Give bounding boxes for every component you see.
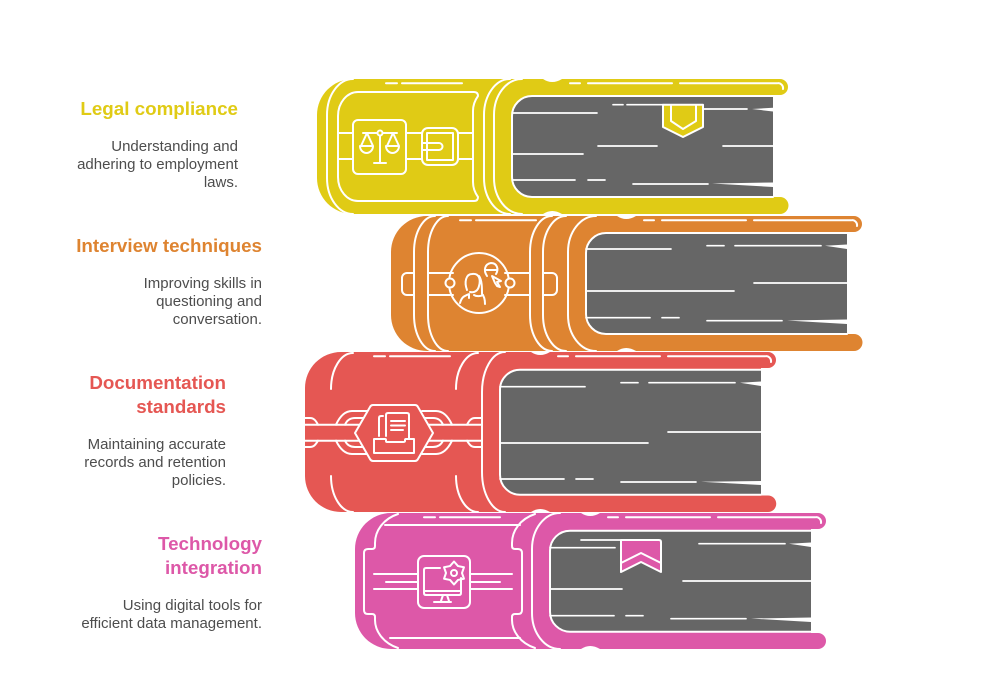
heading: interview techniques: Interview techniques: [76, 235, 262, 256]
book cover: [305, 352, 776, 512]
strap lines: [374, 574, 512, 589]
description: interview techniques: conversation.: [173, 311, 262, 328]
text block: legal compliance: [77, 98, 238, 191]
description: interview techniques: Improving skills in: [144, 275, 262, 292]
description: legal compliance: laws.: [204, 174, 238, 191]
book: interview techniques (orange): [391, 216, 862, 351]
description: legal compliance: Understanding and: [111, 138, 238, 155]
page lines: [586, 246, 847, 321]
cover notches: [543, 79, 562, 82]
page block: [500, 370, 761, 495]
heading: technology integration: integration: [165, 557, 262, 578]
description: documentation standards: records and retention: [84, 454, 226, 471]
heading: technology integration: [158, 533, 262, 578]
chain strap: [305, 411, 482, 454]
page lines: [513, 105, 773, 184]
heading: legal compliance: Legal compliance: [80, 98, 238, 119]
cover outlines: [331, 352, 771, 512]
page block: [512, 96, 773, 197]
text block: documentation standards: [84, 372, 226, 489]
description: technology integration: [81, 597, 262, 632]
page lines: [500, 383, 761, 482]
cover notches: [581, 513, 600, 516]
page block: [586, 233, 847, 334]
bookmark: [621, 540, 661, 572]
page block: [550, 531, 811, 632]
description: legal compliance: [77, 138, 238, 191]
description: documentation standards: [84, 436, 226, 489]
strap: [338, 133, 473, 159]
icon: buckle: [422, 128, 458, 165]
description: interview techniques: [144, 275, 262, 328]
heading: documentation standards: standards: [136, 396, 226, 417]
cover notches: [531, 352, 550, 355]
description: technology integration: efficient data management.: [81, 615, 262, 632]
heading: documentation standards: Documentation: [89, 372, 226, 393]
page lines: [550, 540, 811, 619]
cover notches: [617, 216, 636, 219]
icon: computer with gear: [418, 556, 470, 608]
book: legal compliance (yellow): [317, 79, 788, 214]
description: documentation standards: policies.: [172, 472, 226, 489]
icon: interview people: [446, 253, 514, 313]
description: interview techniques: questioning and: [156, 293, 262, 310]
text block: interview techniques: [76, 235, 262, 328]
book cover: [391, 216, 862, 351]
book cover: [317, 79, 788, 214]
description: technology integration: Using digital tools for: [123, 597, 262, 614]
book: documentation standards (red): [305, 352, 776, 512]
description: documentation standards: Maintaining accurate: [88, 436, 226, 453]
icon: scales of justice: [353, 120, 406, 174]
book: technology integration (pink): [355, 513, 826, 649]
text block: technology integration: [81, 533, 262, 632]
cover outlines: [364, 513, 821, 649]
strap and tabs: [402, 273, 557, 295]
cover outlines: [414, 216, 857, 351]
icon: document tray: [355, 405, 433, 461]
description: legal compliance: adhering to employment: [77, 156, 238, 173]
cover outlines: [327, 79, 783, 214]
heading: documentation standards: [89, 372, 226, 417]
heading: technology integration: Technology: [158, 533, 262, 554]
bookmark: [663, 105, 703, 137]
book cover: [355, 513, 826, 649]
